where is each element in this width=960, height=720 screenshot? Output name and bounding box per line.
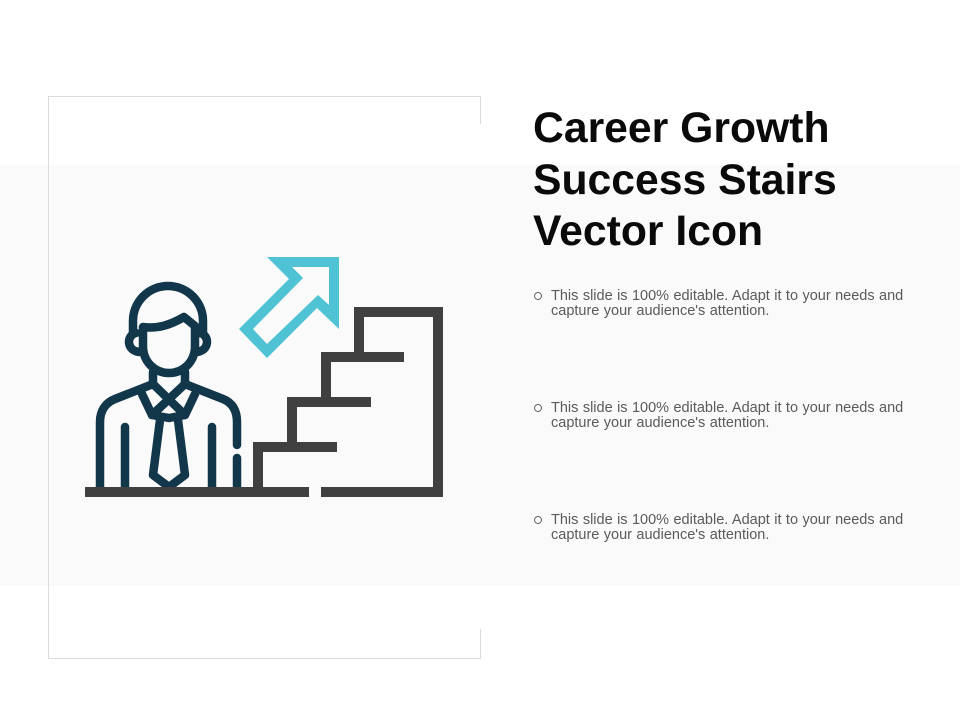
bullet text 1: This slide is 100% editable. Adapt it to your needs and [551,288,903,304]
title [533,104,837,255]
icon: arrow [239,257,339,358]
bullet text 2: This slide is 100% editable. Adapt it to your needs and [551,400,903,416]
title: Vector Icon [533,207,763,255]
background band [0,165,960,586]
icon: stairs [85,307,443,497]
bullet text 2 [534,400,903,431]
title: Success Stairs [533,156,837,204]
bullet text 2: capture your audience's attention. [551,415,769,431]
icon: person [100,286,237,487]
bullet text 1: capture your audience's attention. [551,303,769,319]
title: Career Growth [533,104,830,152]
bullet text 3: capture your audience's attention. [551,527,769,543]
bullet text 3: This slide is 100% editable. Adapt it to your needs and [551,512,903,528]
bullet text 3 [534,512,903,543]
bullet text 1 [534,288,903,319]
frame outline [48,96,481,659]
